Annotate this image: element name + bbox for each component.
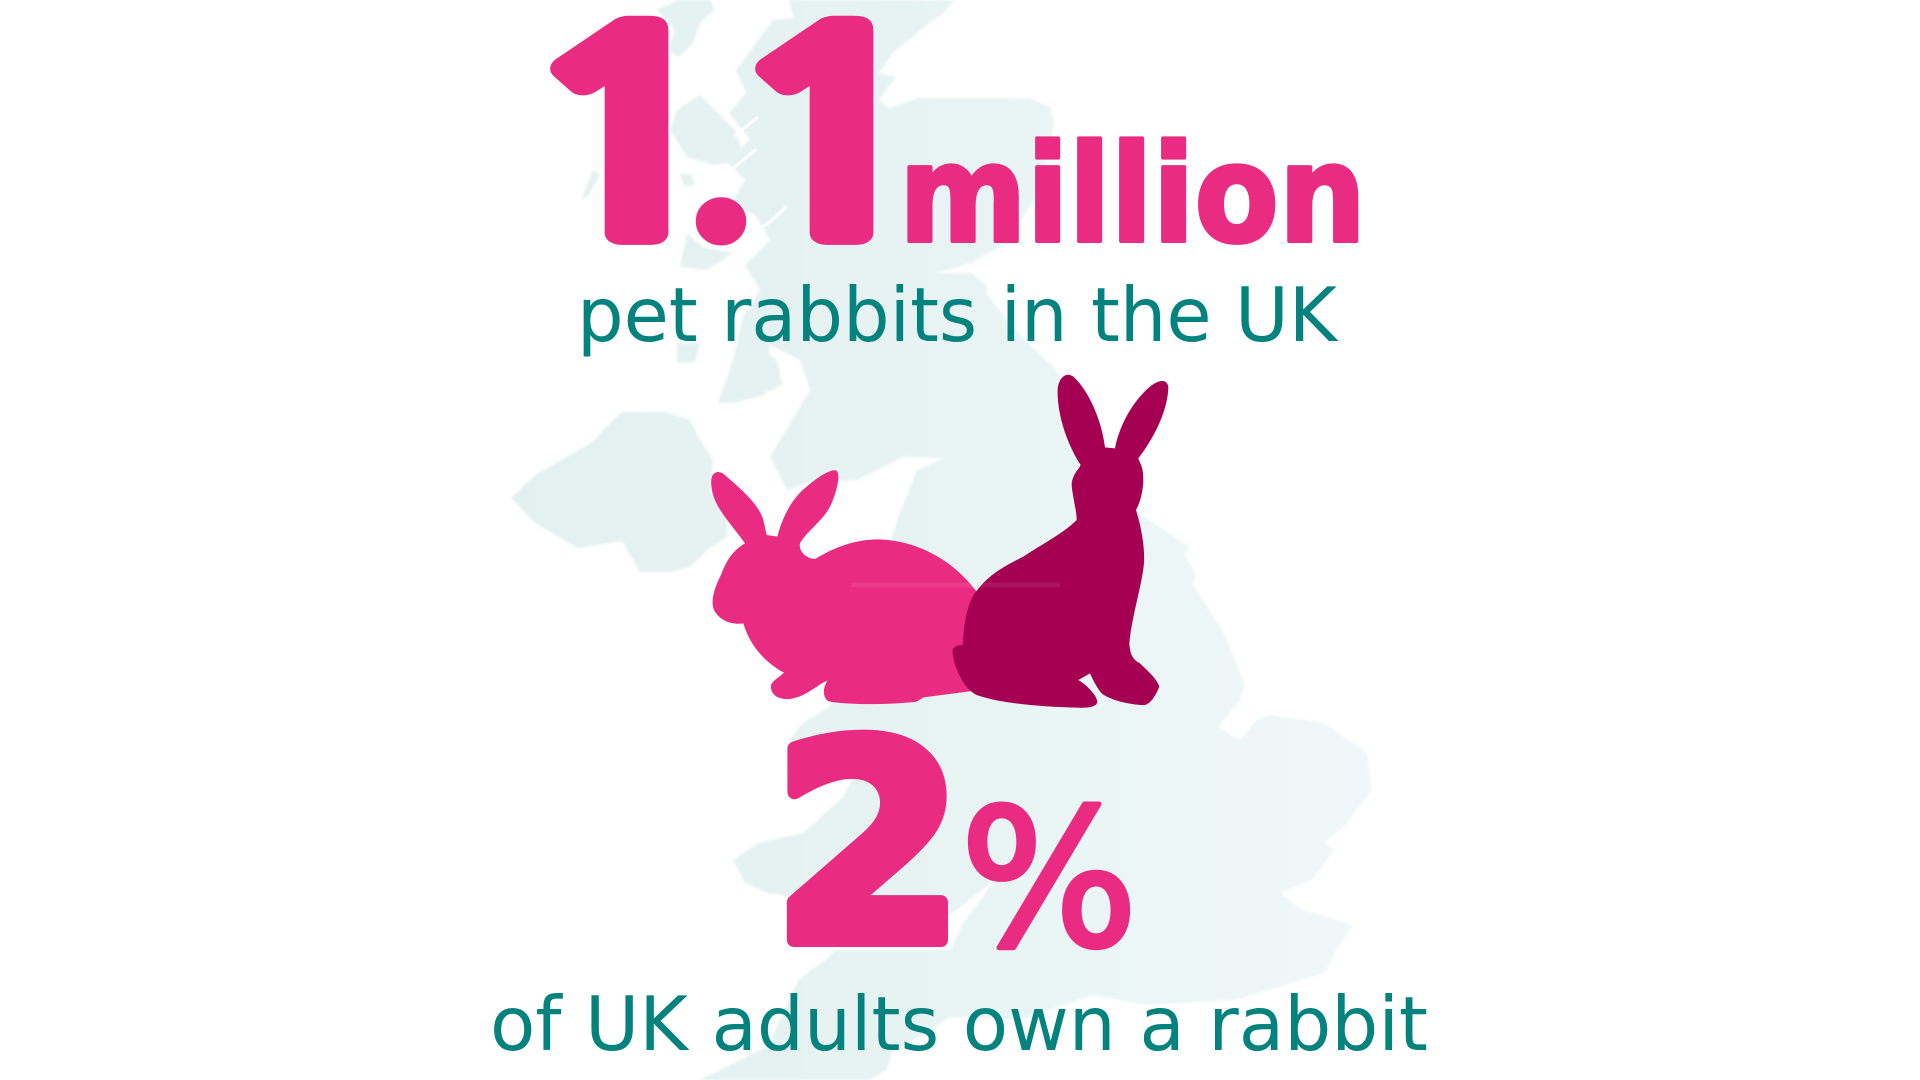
- big number: 2%: 2: [772, 686, 965, 1005]
- big number: 1.1: [513, 0, 948, 278]
- map: Hebrides and islands: [581, 0, 782, 392]
- rabbits illustration: [711, 375, 1168, 708]
- background map of the UK: [511, 0, 1372, 1080]
- big number: 2%: %: [960, 769, 1138, 990]
- icon: dark sitting rabbit: [952, 375, 1168, 708]
- big number: 2%: [772, 686, 1138, 1005]
- map: sea lochs: [725, 118, 786, 235]
- big number: 1.1: 1: [513, 0, 743, 278]
- label: million: million: [899, 116, 1366, 273]
- map: Northern Ireland: [511, 412, 727, 572]
- icon: pink lying rabbit: [711, 470, 980, 704]
- subtitle: pet rabbits in the UK: pet rabbits in the UK: [577, 271, 1339, 359]
- map: Great Britain mainland: [700, 0, 1372, 1080]
- big number: 1.1: 1: [718, 0, 948, 278]
- subtitle: of UK adults own a rabbit: of UK adults own a rabbit: [490, 980, 1428, 1068]
